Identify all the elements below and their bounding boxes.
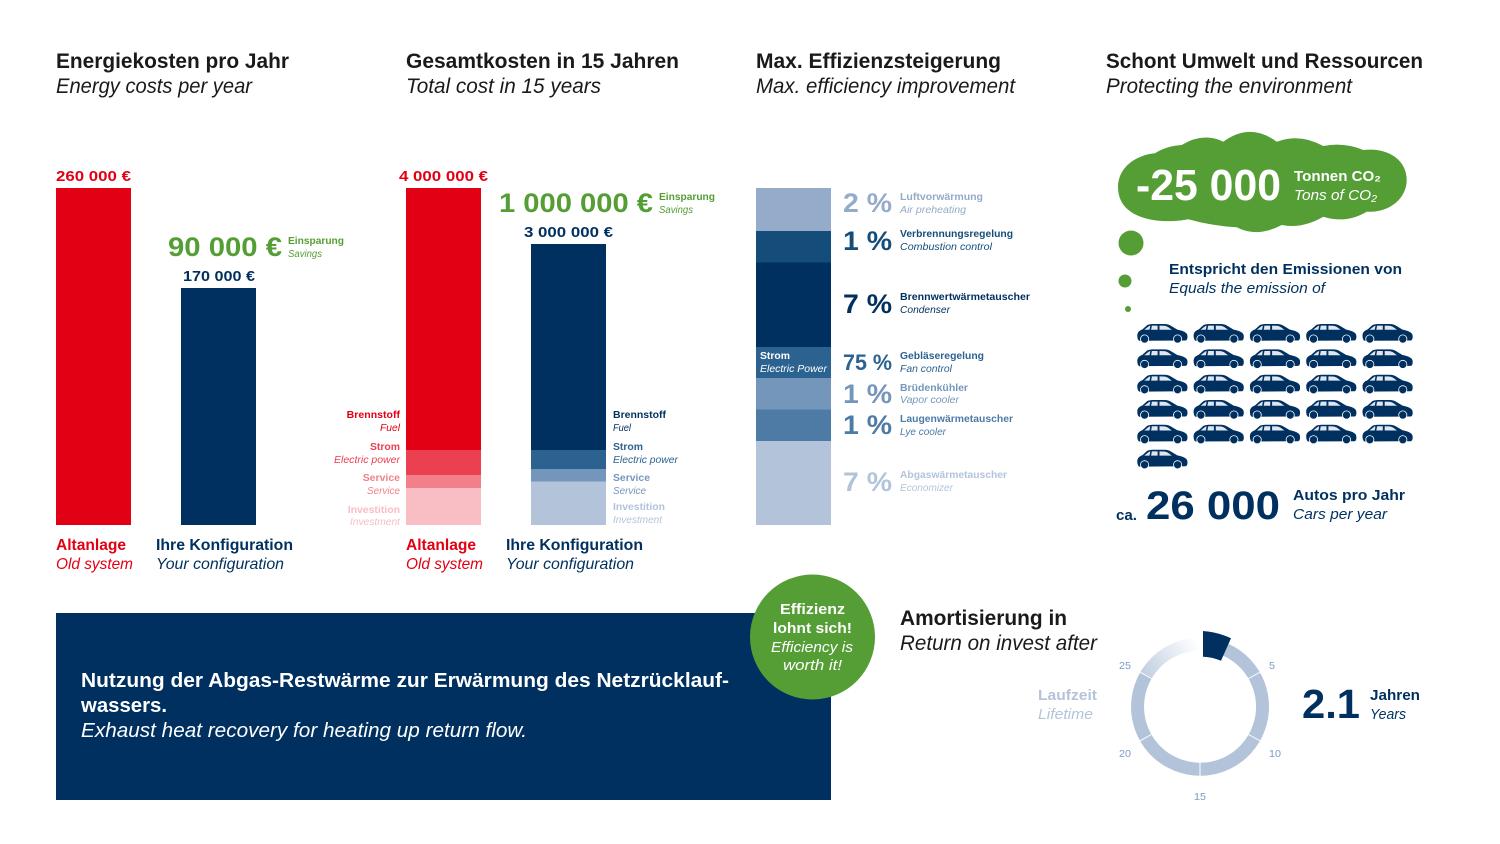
heading: return on invest: Return on invest after: [900, 632, 1098, 655]
donut chart: payback: 15: [1194, 791, 1206, 803]
icon: CO2 cloud: [1118, 132, 1407, 312]
label: lifetime: Lifetime: [1038, 706, 1093, 723]
segment labels: old system: Strom: [370, 441, 400, 453]
savings callout: [499, 188, 715, 218]
panel: total cost in 15 years: [334, 50, 715, 573]
item: fan control: 75 %: [843, 350, 892, 375]
segment labels: your configuration: Brennstoff: [613, 409, 666, 421]
savings callout: Savings: [659, 204, 694, 216]
segment labels: your configuration: Service: [613, 485, 646, 497]
figure: 2.1 years: Jahren: [1370, 687, 1420, 704]
stacked efficiency bar: [756, 188, 831, 525]
item: lye cooler: Lye cooler: [900, 426, 946, 438]
stacked efficiency bar: Electric Power: [760, 363, 827, 375]
label: your configuration: Your configuration: [506, 556, 634, 573]
savings callout: Einsparung: [659, 191, 715, 203]
segment labels: your configuration: Investment: [613, 514, 663, 526]
figure: 2.1 years: [1302, 681, 1420, 727]
heading: total cost: [406, 50, 679, 98]
cars figure: 26 000: [1146, 484, 1280, 528]
label: old system: Altanlage: [406, 537, 476, 554]
label: your configuration: Your configuration: [156, 556, 284, 573]
label: your configuration: Ihre Konfiguration: [156, 537, 293, 554]
savings callout: [168, 232, 344, 262]
label: old system: Altanlage: [56, 537, 126, 554]
label: your configuration: [506, 537, 643, 573]
cars figure: Cars per year: [1293, 506, 1388, 523]
segment labels: old system: Electric power: [334, 454, 400, 466]
item: combustion control: [843, 226, 1013, 256]
item: condenser: [843, 289, 1030, 319]
segment labels: your configuration: Fuel: [613, 422, 632, 434]
segment labels: your configuration: Service: [613, 472, 650, 484]
CO2 figure: [1136, 161, 1381, 210]
banner: exhaust heat recovery: Nutzung der Abgas-Restwärme zur Erwärmung des Netzrücklauf-: [81, 670, 729, 692]
segment labels: your configuration: Electric power: [613, 454, 678, 466]
stacked bar: your configuration: [531, 244, 606, 525]
label: old system: Old system: [56, 556, 133, 573]
cars figure: ca.: [1116, 507, 1137, 524]
text: equals the emission of: [1169, 261, 1402, 297]
bar: your configuration: [181, 288, 256, 525]
panel: max efficiency improvement: [756, 50, 1030, 525]
icon grid: cars: [1137, 324, 1413, 469]
item: vapor cooler: Vapor cooler: [900, 394, 959, 406]
item: economizer: [843, 467, 1007, 497]
heading: total cost: Gesamtkosten in 15 Jahren: [406, 50, 679, 73]
item: fan control: Fan control: [900, 363, 953, 375]
savings callout: Savings: [288, 248, 323, 260]
donut chart: payback: 10: [1269, 748, 1281, 760]
badge: efficiency is worth it: Efficiency is: [771, 639, 854, 656]
item: economizer: 7 %: [843, 467, 892, 497]
segment labels: old system: Brennstoff: [347, 409, 400, 421]
item: vapor cooler: 1 %: [843, 379, 892, 409]
item: condenser: Brennwertwärmetauscher: [900, 291, 1030, 303]
bar: old system: [56, 188, 131, 525]
item: fan control: [843, 350, 984, 375]
label: lifetime: Laufzeit: [1038, 687, 1097, 704]
heading: efficiency: Max. efficiency improvement: [756, 75, 1016, 98]
cars figure: [1116, 484, 1405, 528]
item: combustion control: 1 %: [843, 226, 892, 256]
badge: efficiency is worth it: worth it!: [783, 657, 843, 674]
panel: protecting the environment: [1106, 50, 1423, 528]
savings callout: Einsparung: [288, 235, 344, 247]
item: vapor cooler: Brüdenkühler: [900, 382, 968, 394]
donut chart: payback: 25: [1119, 660, 1131, 672]
savings callout: 1 000 000 €: [499, 188, 653, 218]
heading: environment: Schont Umwelt und Ressourcen: [1106, 50, 1423, 73]
segment labels: old system: [334, 409, 401, 528]
value: your configuration total: 3 000 000 €: [524, 224, 614, 241]
label: old system: Old system: [406, 556, 483, 573]
segment labels: your configuration: Strom: [613, 441, 643, 453]
item: air preheating: [843, 188, 983, 218]
label: old system: [56, 537, 133, 573]
banner: exhaust heat recovery: Exhaust heat recovery for heating up return flow.: [81, 720, 527, 742]
item: lye cooler: [843, 410, 1013, 440]
CO2 figure: Tons of CO₂: [1294, 187, 1377, 204]
donut chart: payback: [1119, 631, 1281, 803]
heading: total cost: Total cost in 15 years: [406, 75, 601, 98]
value: your configuration: 170 000 €: [183, 268, 256, 285]
badge: efficiency is worth it: Effizienz: [780, 601, 845, 618]
segment labels: old system: Service: [367, 485, 400, 497]
text: equals the emission of: Equals the emission of: [1169, 280, 1327, 297]
CO2 figure: Tonnen CO₂: [1294, 168, 1381, 185]
banner: exhaust heat recovery: [56, 613, 831, 800]
item: air preheating: 2 %: [843, 188, 892, 218]
item: fan control: Gebläseregelung: [900, 350, 984, 362]
item: air preheating: Air preheating: [899, 204, 966, 216]
stacked efficiency bar: Strom: [760, 350, 790, 362]
item: economizer: Abgaswärmetauscher: [900, 469, 1007, 481]
stacked bar: old system: [406, 188, 481, 525]
segment labels: old system: Service: [363, 472, 400, 484]
figure: 2.1 years: 2.1: [1302, 681, 1360, 727]
item: economizer: Economizer: [900, 482, 953, 494]
segment labels: old system: Fuel: [380, 422, 401, 434]
value: old system total: 4 000 000 €: [399, 168, 489, 185]
donut chart: payback: 5: [1269, 660, 1275, 672]
item: lye cooler: 1 %: [843, 410, 892, 440]
segment labels: your configuration: [613, 409, 678, 526]
text: equals the emission of: Entspricht den Emissionen von: [1169, 261, 1402, 278]
item: vapor cooler: [843, 379, 968, 409]
heading: energy costs: Energiekosten pro Jahr: [56, 50, 289, 73]
label: lifetime: [1038, 687, 1097, 723]
heading: energy costs: [56, 50, 289, 98]
label: your configuration: [156, 537, 293, 573]
item: lye cooler: Laugenwärmetauscher: [900, 413, 1013, 425]
panel: return on invest: [900, 607, 1420, 803]
item: condenser: 7 %: [843, 289, 892, 319]
heading: environment: Protecting the environment: [1106, 75, 1353, 98]
CO2 figure: -25 000: [1136, 161, 1281, 210]
heading: return on invest: [900, 607, 1098, 655]
panel: energy costs per year: [56, 50, 344, 573]
cars figure: Autos pro Jahr: [1293, 487, 1405, 504]
heading: efficiency: [756, 50, 1016, 98]
segment labels: your configuration: Investition: [613, 501, 665, 513]
value: old system: 260 000 €: [56, 168, 132, 185]
item: combustion control: Verbrennungsregelung: [900, 228, 1013, 240]
savings callout: 90 000 €: [168, 232, 282, 262]
segment labels: old system: Investment: [350, 516, 401, 528]
label: your configuration: Ihre Konfiguration: [506, 537, 643, 554]
item: condenser: Condenser: [900, 304, 950, 316]
banner: exhaust heat recovery: wassers.: [80, 695, 167, 717]
label: old system: [406, 537, 483, 573]
figure: 2.1 years: Years: [1370, 706, 1406, 723]
heading: return on invest: Amortisierung in: [900, 607, 1067, 630]
segment labels: old system: Investition: [348, 504, 400, 516]
heading: environment: [1106, 50, 1423, 98]
heading: efficiency: Max. Effizienzsteigerung: [756, 50, 1001, 73]
donut chart: payback: 20: [1119, 748, 1131, 760]
badge: efficiency is worth it: lohnt sich!: [773, 620, 852, 637]
heading: energy costs: Energy costs per year: [56, 75, 253, 98]
badge: efficiency is worth it: [750, 574, 875, 700]
item: air preheating: Luftvorwärmung: [900, 191, 983, 203]
item: combustion control: Combustion control: [900, 241, 993, 253]
